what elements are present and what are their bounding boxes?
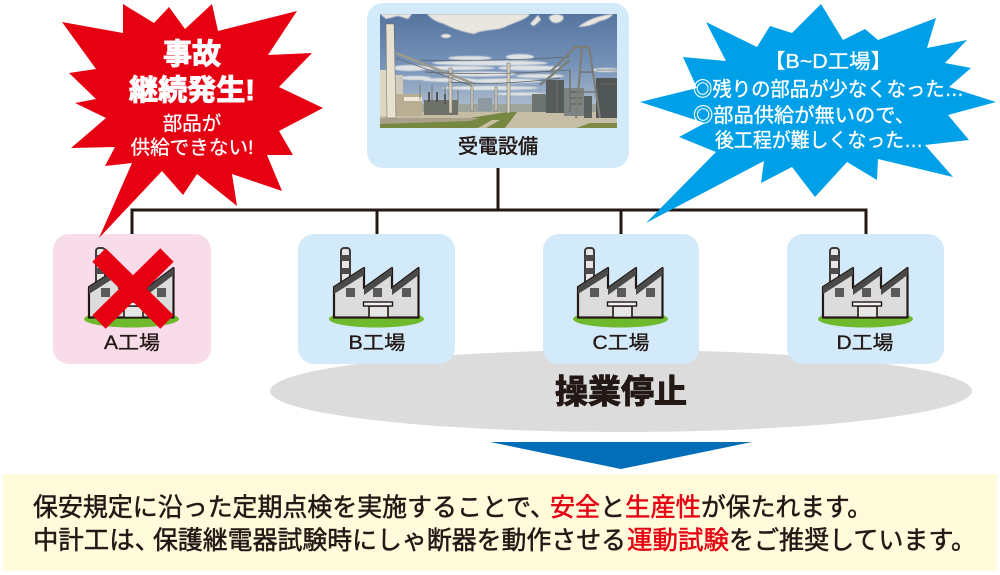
label: A工場: A工場 [104, 332, 160, 354]
text: line 1 [33, 494, 872, 522]
text: line 1: と [600, 494, 625, 522]
text: line 2: 中計工は、 [33, 527, 160, 555]
text: line 2 [33, 527, 976, 555]
callout: blue burst [640, 4, 996, 223]
icon: factory D [818, 248, 913, 328]
icon: factory B [329, 248, 424, 328]
text: 供給できない!: 供給できない! [130, 137, 254, 159]
panel: D factory [787, 234, 944, 364]
callout: red burst [62, 4, 323, 238]
image: substation scene [380, 14, 620, 128]
connector lines [132, 166, 866, 234]
label: 操業停止: 操業停止 [555, 373, 687, 410]
label: C工場: C工場 [592, 332, 650, 354]
text: 部品が: 部品が [163, 113, 221, 135]
text: item 2 continued: 後工程が難しくなった… [715, 129, 923, 152]
panel: A factory [53, 234, 211, 364]
text: line 1: 生産性 [625, 494, 701, 522]
text: line 1: 安全 [550, 494, 600, 522]
label: D工場: D工場 [836, 332, 894, 354]
shutdown ellipse [270, 350, 972, 432]
text: line 2: 保護継電器試験時にしゃ断器を動作させる [153, 527, 626, 555]
text: item 1: ◎残りの部品が少なくなった… [693, 78, 964, 101]
panel: conclusion [3, 474, 997, 571]
text: line 1: が保たれます。 [701, 494, 872, 522]
icon: factory A [84, 248, 179, 328]
text: line 2: 運動試験 [627, 527, 729, 555]
panel: C factory [543, 234, 699, 364]
icon: red cross [99, 255, 167, 322]
icon: factory C [573, 248, 668, 328]
label: B工場: B工場 [348, 332, 406, 354]
panel: power receiving equipment [367, 3, 629, 168]
text: B~D工場: 【B~D工場】 [764, 50, 892, 73]
label: 受電設備: 受電設備 [458, 135, 538, 158]
pillars [386, 24, 510, 118]
text: item 2: ◎部品供給が無いので、 [693, 104, 915, 127]
panel: B factory [298, 234, 455, 364]
heading: 事故: 事故 [163, 38, 221, 71]
heading: 継続発生!: 継続発生! [129, 74, 255, 107]
arrow: down [490, 442, 752, 469]
text: line 1: 保安規定に沿った定期点検を実施することで、 [33, 494, 555, 522]
text: line 2: をご推奨しています。 [729, 527, 976, 555]
